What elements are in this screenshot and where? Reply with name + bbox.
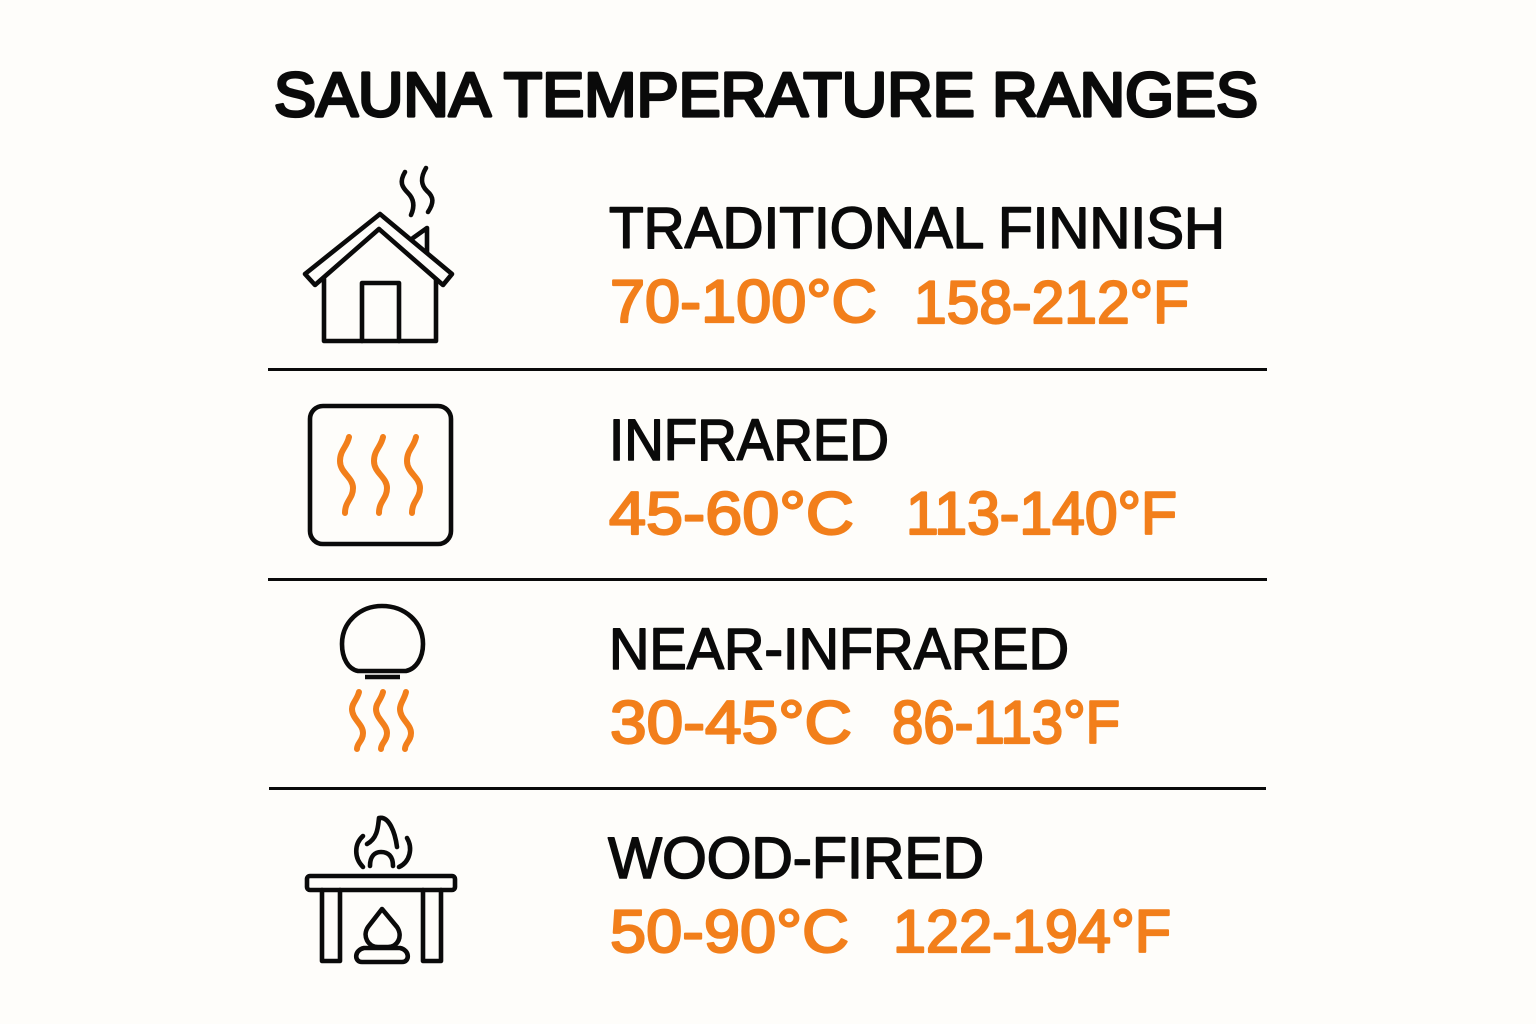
temperature: fahrenheit: 122-194°F: [893, 898, 1171, 965]
heading: infrared: INFRARED: [609, 408, 889, 473]
title: SAUNA TEMPERATURE RANGES: [274, 61, 1258, 130]
temperature: fahrenheit: 113-140°F: [906, 480, 1177, 547]
icon: house with smoking chimney: [305, 168, 452, 341]
temperature: celsius: 30-45°C: [610, 689, 852, 756]
temperature: celsius: 45-60°C: [609, 480, 854, 547]
icon: heat lamp with heat waves: [342, 606, 423, 749]
heading: near-infrared: NEAR-INFRARED: [609, 617, 1069, 682]
heading: traditional finnish: TRADITIONAL FINNISH: [609, 196, 1225, 261]
panel: wood-fired: [307, 818, 1171, 965]
temperature: fahrenheit: 158-212°F: [914, 269, 1189, 336]
heading: wood-fired: WOOD-FIRED: [608, 826, 984, 891]
panel: infrared: [310, 406, 1177, 547]
icon: wood-fired stove with flames: [307, 818, 455, 962]
icon: infrared panel with heat waves: [310, 406, 451, 544]
temperature: celsius: 50-90°C: [610, 898, 849, 965]
panel: near-infrared: [342, 606, 1120, 756]
panel: traditional finnish: [305, 168, 1225, 341]
temperature: celsius: 70-100°C: [610, 268, 877, 335]
temperature: fahrenheit: 86-113°F: [892, 689, 1120, 756]
